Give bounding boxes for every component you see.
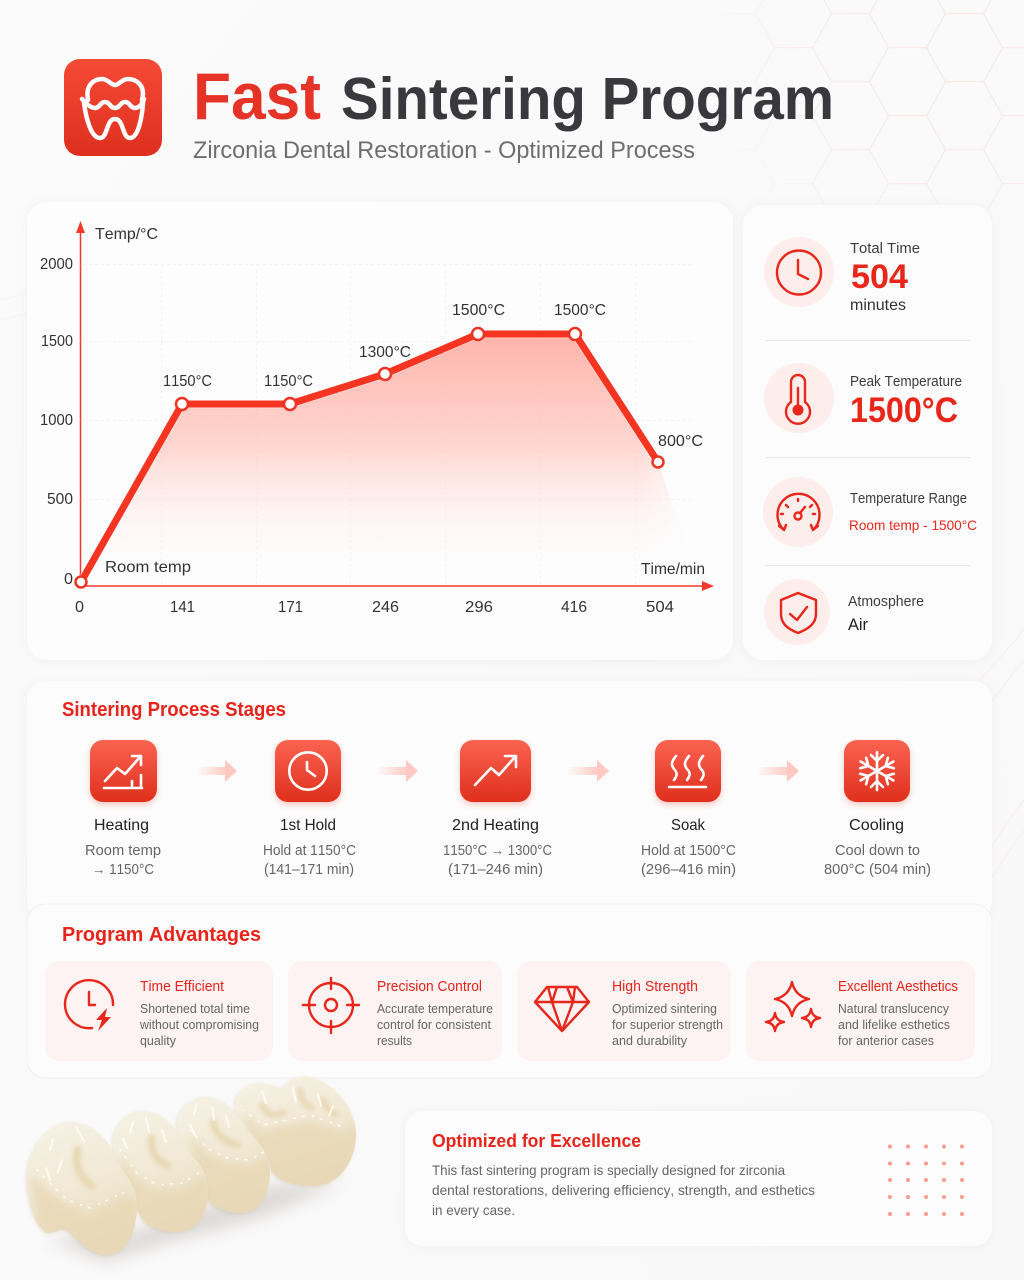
dot grid: [888, 1144, 964, 1216]
axes: [76, 221, 714, 591]
card: excellent aesthetics: [746, 961, 975, 1061]
point labels: 1150°C: [163, 373, 212, 390]
stage: cooling: [824, 740, 931, 878]
peak temperature: 1500°C: [850, 391, 958, 430]
stage: cooling: 800°C (504 min): [824, 862, 931, 878]
body text: [432, 1162, 815, 1218]
title: [193, 59, 834, 133]
body text: This fast sintering program is specially designed for zirconia: [432, 1162, 785, 1178]
card: time efficient: quality: [140, 1034, 177, 1048]
axis labels: 504: [646, 599, 674, 616]
axis labels: 0: [75, 599, 84, 616]
body text: in every case.: [432, 1202, 515, 1218]
stage: soak: [641, 740, 736, 878]
stage: heating: → 1150°C: [92, 862, 154, 878]
stage: heating: [85, 740, 161, 878]
axis labels: 1000: [40, 412, 73, 429]
peak temperature: [764, 363, 962, 433]
total time: minutes: [850, 297, 906, 314]
stage: 1st hold: (141–171 min): [264, 862, 354, 878]
axis labels: 171: [278, 599, 303, 616]
axis labels: 2000: [40, 256, 73, 273]
point labels: 800°C: [658, 433, 703, 450]
point labels: 1150°C: [264, 373, 313, 390]
heading: Sintering Process Stages: [62, 698, 286, 721]
card: time efficient: [45, 961, 273, 1061]
body text: dental restorations, delivering efficiency, strength, and esthetics: [432, 1182, 815, 1198]
stage: 2nd heating: 2nd Heating: [452, 817, 539, 834]
card: excellent aesthetics: and lifelike esthetics: [838, 1018, 950, 1032]
card: time efficient: without compromising: [139, 1018, 259, 1032]
card: high strength: [517, 961, 731, 1061]
total time: 504: [851, 258, 908, 296]
panel: sintering process stages: [27, 681, 992, 921]
atmosphere: Air: [848, 615, 868, 634]
axis labels: 141: [170, 599, 195, 616]
point labels: 1300°C: [359, 344, 411, 361]
arrow: [567, 760, 609, 782]
panel: program advantages: [27, 904, 992, 1078]
card: high strength: for superior strength: [612, 1018, 723, 1032]
title: Sintering Program: [341, 66, 834, 132]
temperature range: [763, 477, 977, 547]
stage: 2nd heating: [443, 740, 552, 878]
stage: cooling: Cool down to: [835, 843, 920, 859]
axis labels: Time/min: [641, 561, 705, 578]
arrow: [377, 760, 418, 782]
subtitle: Zirconia Dental Restoration - Optimized Process: [193, 137, 695, 164]
card: precision control: [288, 961, 502, 1061]
axis labels: 0: [64, 571, 73, 588]
stage: soak: Hold at 1500°C: [641, 843, 736, 859]
axis labels: 416: [561, 599, 587, 616]
stage: heating: Room temp: [85, 843, 161, 859]
axis labels: 500: [47, 491, 73, 508]
axis labels: Temp/°C: [95, 226, 158, 243]
panel: key parameters: [743, 205, 992, 660]
axis labels: 246: [372, 599, 399, 616]
arrow: [196, 760, 237, 782]
stage: cooling: Cooling: [849, 817, 904, 834]
area under curve: [119, 338, 670, 524]
point labels: 1500°C: [452, 302, 505, 319]
axis labels: [40, 226, 705, 616]
card: excellent aesthetics: Excellent Aesthetics: [838, 979, 958, 995]
stage: 1st hold: [263, 740, 356, 878]
panel: optimized for excellence: [405, 1111, 992, 1246]
axis labels: 1500: [41, 333, 73, 350]
card: precision control: Accurate temperature: [377, 1002, 493, 1016]
stage: heating: Heating: [94, 817, 149, 834]
card: high strength: and durability: [612, 1034, 688, 1048]
header logo: tooth icon: [64, 59, 162, 156]
illustration: zirconia dental crowns: [27, 1076, 360, 1262]
stage: 1st hold: 1st Hold: [280, 817, 336, 834]
peak temperature: Peak Temperature: [850, 374, 962, 390]
atmosphere: [764, 579, 924, 645]
stage: soak: (296–416 min): [641, 862, 736, 878]
stage: 2nd heating: (171–246 min): [448, 862, 543, 878]
card: precision control: control for consistent: [377, 1018, 492, 1032]
heading: Optimized for Excellence: [432, 1130, 641, 1151]
card: time efficient: Time Efficient: [140, 979, 224, 995]
point labels: 1500°C: [554, 302, 606, 319]
total time: [764, 237, 920, 314]
total time: Total Time: [850, 241, 920, 257]
arrow: [757, 760, 799, 782]
card: excellent aesthetics: Natural translucency: [838, 1002, 950, 1016]
stage: 2nd heating: 1150°C → 1300°C: [443, 843, 552, 859]
atmosphere: Atmosphere: [848, 594, 924, 610]
temperature range: Temperature Range: [850, 491, 967, 507]
axis labels: Room temp: [105, 559, 191, 576]
axis labels: 296: [465, 599, 493, 616]
card: time efficient: Shortened total time: [140, 1002, 250, 1016]
temperature curve: [76, 328, 664, 588]
temperature range: Room temp - 1500°C: [849, 517, 977, 533]
card: excellent aesthetics: for anterior cases: [838, 1034, 934, 1048]
card: high strength: High Strength: [612, 979, 698, 995]
panel: temperature chart: [40, 221, 714, 612]
heading: Program Advantages: [62, 923, 261, 946]
stage: soak: Soak: [671, 817, 706, 834]
card: precision control: Precision Control: [377, 979, 482, 995]
card: high strength: Optimized sintering: [612, 1002, 717, 1016]
title: Fast: [193, 59, 321, 133]
stage: 1st hold: Hold at 1150°C: [263, 843, 356, 859]
point labels: [163, 302, 703, 450]
card: precision control: results: [377, 1034, 412, 1048]
